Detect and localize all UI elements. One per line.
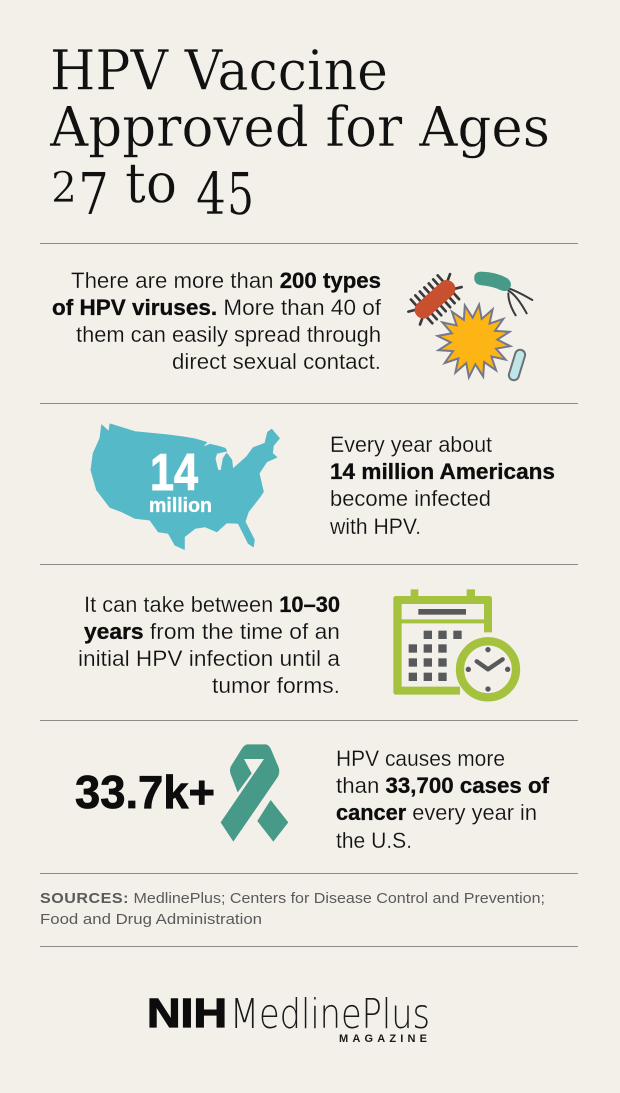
text block: 10-30 years: initial HPV infection until a	[78, 646, 341, 671]
text block: 10-30 years: tumor forms.	[212, 673, 340, 698]
logo: NIH MedlinePlus Magazine: NIH	[147, 990, 227, 1036]
text block: 14 million Americans: with HPV.	[329, 514, 421, 539]
title: HPV Vaccine	[50, 38, 388, 102]
text block: 14 million Americans	[329, 432, 555, 539]
icon: blue capsule	[508, 349, 526, 381]
text block: HPV types: direct sexual contact.	[172, 349, 381, 374]
text block: HPV types: them can easily spread through	[76, 322, 381, 347]
text block: 33,700 cases: the U.S.	[336, 828, 412, 853]
text block: HPV types: of HPV viruses. More than 40 of	[52, 295, 382, 320]
icon: awareness ribbon	[221, 744, 288, 842]
title: 4	[196, 160, 226, 228]
logo: NIH MedlinePlus Magazine	[147, 990, 430, 1045]
text block: 10-30 years: It can take between 10–30	[84, 592, 340, 617]
text block: 10-30 years	[78, 592, 341, 698]
text block: 14 million Americans: Every year about	[330, 432, 492, 457]
text block: 33,700 cases: than 33,700 cases of	[336, 773, 550, 798]
map number: 14: 14	[150, 444, 198, 502]
icon: calendar and clock	[393, 589, 516, 697]
text block: 10-30 years: years from the time of an	[84, 619, 340, 644]
title: 5	[227, 160, 254, 228]
text block: HPV types	[52, 268, 382, 374]
icon: green bacterium	[475, 272, 532, 315]
title: 2	[51, 163, 77, 212]
sources: Food and Drug Administration	[40, 911, 262, 928]
title: Approved for Ages	[49, 95, 550, 159]
text block: 33,700 cases: cancer every year in	[336, 800, 537, 825]
sources	[40, 890, 545, 928]
map label: million: million	[149, 495, 212, 517]
icon: yellow virus	[433, 300, 515, 382]
icon: viruses and bacteria	[403, 269, 532, 382]
text block: HPV types: There are more than 200 types	[71, 268, 381, 293]
text block: 14 million Americans: become infected	[330, 486, 491, 511]
text block: 33,700 cases	[336, 746, 550, 853]
logo: NIH MedlinePlus Magazine: MAGAZINE	[339, 1033, 427, 1045]
icon: red bacterium	[403, 269, 467, 330]
logo: NIH MedlinePlus Magazine: MedlinePlus	[230, 990, 430, 1038]
title: to	[125, 151, 177, 215]
stat: 33.7k+: 33.7k+	[75, 766, 215, 818]
text block: 14 million Americans: 14 million Americans	[330, 459, 555, 484]
title: 7	[78, 160, 109, 228]
text block: 33,700 cases: HPV causes more	[336, 746, 505, 771]
title	[49, 38, 550, 228]
map: United States with 14 million	[91, 424, 279, 549]
sources: SOURCES: MedlinePlus; Centers for Disease Control and Prevention;	[40, 890, 545, 907]
